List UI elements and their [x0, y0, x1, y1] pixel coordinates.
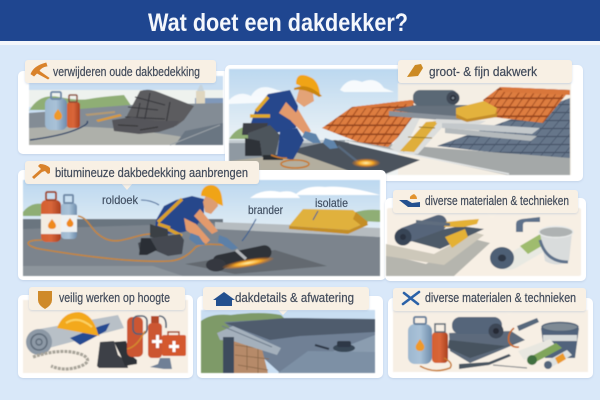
illustration: debris pile and gas cylinders: [29, 76, 223, 145]
label: [25, 161, 259, 190]
cylinders: [41, 200, 61, 242]
panel: dakdetails & afwatering: [197, 287, 383, 378]
worker: [154, 196, 204, 239]
membrane with flame: [290, 140, 420, 175]
label: bitumineuze dakbedekking aanbrengen: [55, 165, 248, 180]
hoses: [28, 216, 224, 261]
insulation: [289, 209, 367, 230]
label: [393, 288, 586, 316]
icon: hammer: [31, 63, 49, 79]
label: [398, 60, 572, 83]
illustration: tools and materials: [393, 310, 588, 372]
icon: brush: [407, 64, 423, 77]
label: groot- & fijn dakwerk: [429, 64, 537, 79]
label: [25, 60, 216, 83]
label: veilig werken op hoogte: [59, 290, 170, 305]
icon: hammer: [32, 164, 50, 179]
label: [393, 190, 578, 219]
panel: diverse materialen & technieken (midden): [385, 190, 586, 281]
label: [203, 287, 369, 315]
panel: bitumineuze dakbedekking aanbrengen: brander: [248, 203, 283, 217]
slate roof: [437, 98, 570, 158]
illustration: gutter and drain: [201, 310, 375, 373]
illustration: rolls, insulation, bucket: [386, 208, 581, 276]
panel: bitumineuze dakbedekking aanbrengen: [18, 161, 386, 280]
pointers: [141, 200, 318, 241]
panel: veilig werken op hoogte: [18, 287, 193, 378]
header banner: [0, 0, 600, 45]
left tiles: [322, 100, 418, 147]
icon: crossed tools: [403, 292, 419, 304]
icon: materials: [399, 200, 420, 207]
worker: [247, 90, 298, 135]
panel: bitumineuze dakbedekking aanbrengen: isolatie: [315, 196, 348, 210]
illustration: applying bitumen roll with torch: [23, 180, 380, 276]
panel: verwijderen oude dakbedekking: [18, 60, 229, 154]
label: [29, 287, 185, 315]
label: dakdetails & afwatering: [235, 290, 354, 305]
membrane layers: [392, 105, 493, 121]
icon: house: [213, 292, 235, 306]
illustration: safety gear: [23, 300, 188, 373]
illustration: roofer with torch on roof: [229, 69, 571, 175]
callout labels: roldoek: [102, 193, 139, 207]
right tiles: [483, 87, 570, 123]
title: Wat doet een dakdekker?: [148, 9, 408, 37]
icon: shield: [38, 291, 52, 309]
panel: groot- & fijn dakwerk: [225, 60, 583, 181]
label: verwijderen oude dakbedekking: [53, 64, 200, 79]
panel: diverse materialen & technieken (onder): [388, 288, 593, 378]
eaves strip: [343, 140, 570, 175]
